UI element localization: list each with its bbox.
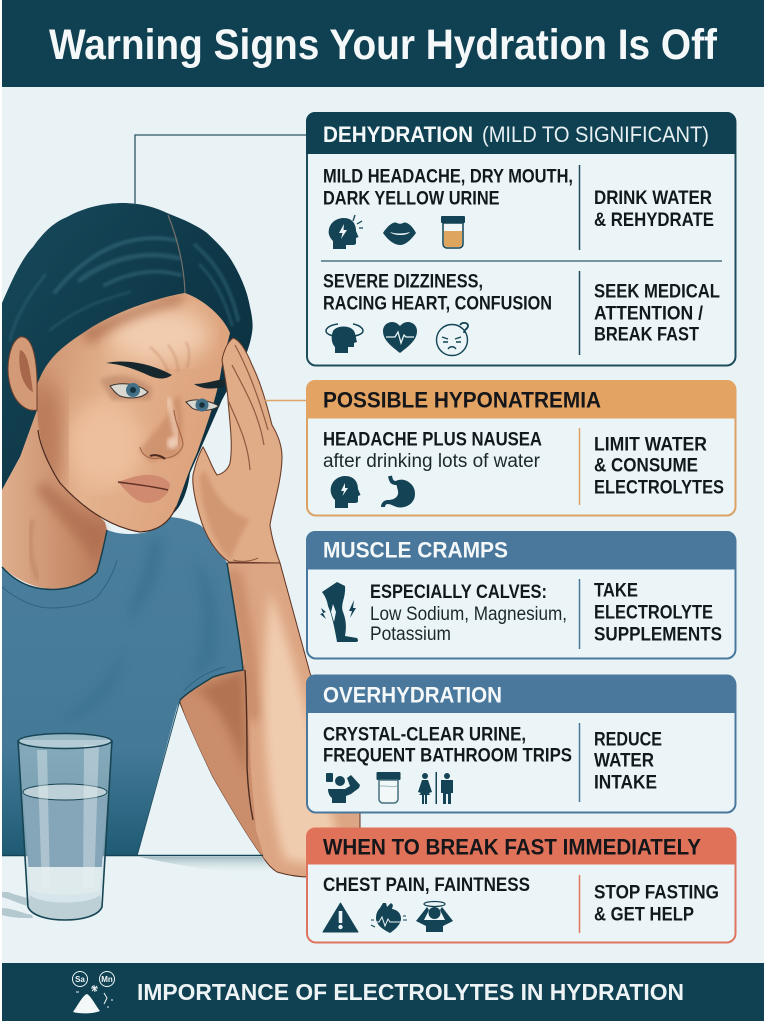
panel: overhydration [306,674,736,812]
symptoms: headache plus nausea: HEADACHE PLUS NAUSEA [323,428,542,450]
heading: hyponatremia: POSSIBLE HYPONATREMIA [323,388,601,412]
symptoms: mild: DARK YELLOW URINE [323,188,500,210]
action: stop fasting: STOP FASTING [594,882,719,904]
illustration: woman with headache and glass of water [2,203,360,920]
divider [578,875,580,933]
action: seek medical attention: SEEK MEDICAL [594,280,720,302]
footer text: IMPORTANCE OF ELECTROLYTES IN HYDRATION [137,979,684,1005]
panel: muscle cramps [306,531,736,658]
symptoms: chest pain: CHEST PAIN, FAINTNESS [323,874,530,896]
face [37,293,230,532]
icon: electrolytes [72,972,114,1013]
forehead wrinkles [150,342,189,372]
action: seek medical attention: BREAK FAST [594,324,699,346]
action: drink water: & REHYDRATE [594,209,714,231]
nose [140,410,183,459]
connector: hyponatremia to head [265,400,306,402]
heading: break fast: WHEN TO BREAK FAST IMMEDIATELY [323,834,701,860]
panel: dehydration [306,112,736,366]
symptoms: headache plus nausea: after drinking lots of water [323,451,541,472]
symptoms: especially calves: Low Sodium, Magnesium, [370,604,567,625]
symptoms: clear urine: CRYSTAL-CLEAR URINE, [323,724,526,746]
connector: dehydration to head [135,135,306,205]
symptoms: especially calves: ESPECIALLY CALVES: [370,581,547,603]
left eyebrow [106,362,172,378]
action: reduce water: INTAKE [594,772,657,794]
action: limit water: ELECTROLYTES [594,476,724,498]
hand [193,338,282,563]
table edge [2,854,263,856]
panel: when to break fast [306,828,736,942]
heading: dehydration: DEHYDRATION [323,122,473,147]
action: take supplements: ELECTROLYTE [594,602,713,624]
footer banner [2,963,764,1021]
icon: electrolytes: Sa [75,975,85,984]
icon: electrolytes: Mn [101,975,113,984]
action: stop fasting: & GET HELP [594,904,694,926]
icon: faint person [416,902,453,932]
symptoms: clear urine: FREQUENT BATHROOM TRIPS [323,744,572,766]
action: limit water: LIMIT WATER [594,434,707,456]
left eye [110,384,148,398]
hair parting [168,215,185,293]
right eye [186,400,219,410]
icon: toilet person [326,773,360,803]
icon: leg cramp [320,582,358,642]
arm [180,563,360,877]
heading: muscle cramps: MUSCLE CRAMPS [323,538,508,562]
action: limit water: & CONSUME [594,454,698,476]
right eyebrow [194,379,226,389]
ear [8,337,37,410]
divider [578,579,580,649]
icon: racing heart [383,322,417,353]
icon: warning triangle [323,903,358,932]
symptoms: severe: RACING HEART, CONFUSION [323,292,552,314]
icon: confused face [436,323,468,356]
face outline [38,430,176,532]
icon: urine sample [441,216,465,248]
action: seek medical attention: ATTENTION / [594,302,704,324]
icon: anatomical heart [371,903,407,933]
symptoms: especially calves: Potassium [370,624,451,645]
title banner [2,0,764,87]
icon: restroom sign [418,772,453,804]
icon: dizziness [326,324,363,353]
icon: stomach [383,476,413,507]
heading: dehydration: (MILD TO SIGNIFICANT) [482,122,709,147]
icon: headache [329,215,363,249]
divider [578,723,580,802]
panel: possible hyponatremia [306,380,736,516]
neck [2,410,107,589]
shirt [2,517,243,856]
hair back [2,203,253,516]
glass of water [2,734,112,920]
action: take supplements: TAKE [594,580,638,602]
arm crease [245,670,253,820]
heading: overhydration: OVERHYDRATION [323,682,502,708]
action: reduce water: WATER [594,750,654,772]
symptoms: mild: MILD HEADACHE, DRY MOUTH, [323,166,573,188]
action: reduce water: REDUCE [594,728,662,750]
symptoms: severe: SEVERE DIZZINESS, [323,270,483,292]
action: drink water: DRINK WATER [594,187,712,209]
hair strands [10,238,238,340]
divider [578,428,580,505]
icon: dry mouth [383,222,416,245]
icon: clear urine cup [376,772,400,803]
action: take supplements: SUPPLEMENTS [594,624,722,646]
table shadow [140,857,285,874]
icon: headache [331,476,360,508]
lips [118,475,170,503]
divider [578,165,580,355]
